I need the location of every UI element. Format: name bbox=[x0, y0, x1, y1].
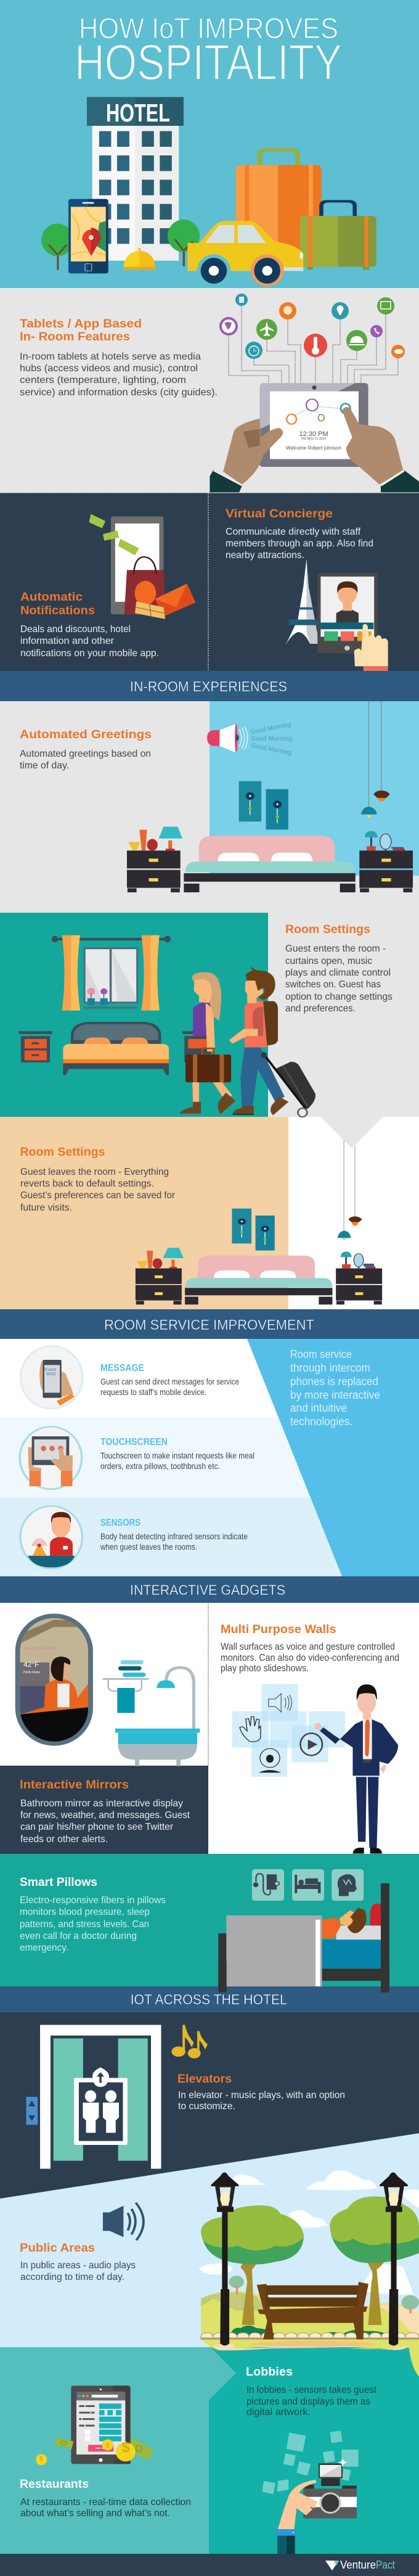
tablet screen text: FRI,NOV 21 2014 bbox=[301, 437, 326, 441]
heading: automatic notifications: Automatic bbox=[20, 591, 83, 604]
text block: room settings leave: Guest’s preferences can be saved for bbox=[20, 1190, 176, 1201]
text block: automatic notifications: information and other bbox=[20, 636, 115, 646]
illustration: wall monitors and presenter bbox=[232, 1684, 398, 1854]
heading: automatic notifications bbox=[20, 591, 95, 617]
text block: automated greetings: Automated greetings based on bbox=[20, 749, 151, 759]
service icon bubbles bbox=[219, 294, 405, 359]
text block: room service summary: Room service bbox=[290, 1348, 352, 1360]
illustration: interactive mirror bbox=[15, 1613, 93, 1746]
text block: tablets bbox=[20, 352, 218, 398]
illustration: towels and bathtub bbox=[103, 1660, 200, 1766]
text block: tablets: hubs (access videos and music), control bbox=[20, 363, 198, 374]
text block: room service summary: and intuitive bbox=[290, 1402, 347, 1414]
logo: VenturePact: Venture bbox=[340, 2559, 376, 2571]
illustration: smart pillow icons and bed bbox=[218, 1869, 389, 2001]
illustration: elevator bbox=[26, 2025, 161, 2169]
icon: hand holding phone: Guest bbox=[44, 1368, 56, 1372]
panel: header background bbox=[0, 0, 419, 288]
heading: public areas: Public Areas bbox=[20, 2242, 95, 2255]
panel: restaurants background bbox=[0, 2347, 419, 2554]
heading: tablets: In- Room Features bbox=[20, 331, 130, 344]
text block: smart pillows: monitors blood pressure, sleep bbox=[20, 1907, 150, 1917]
text block: virtual concierge bbox=[226, 527, 373, 561]
text block: room settings leave: future visits. bbox=[20, 1203, 72, 1213]
heading: multi purpose walls: Multi Purpose Walls bbox=[221, 1623, 336, 1636]
row: sensors bbox=[20, 1506, 248, 1568]
banner: room service improvement bbox=[0, 1309, 419, 1339]
text block: room service summary: phones is replaced bbox=[290, 1375, 378, 1388]
text block: room settings enter: plays and climate control bbox=[285, 968, 391, 978]
text block: elevators: In elevator - music plays, with an option bbox=[178, 2090, 345, 2101]
panel: grey pointer bbox=[320, 1117, 383, 1148]
panel: greetings background bbox=[0, 701, 419, 1117]
illustration: hotel scene bbox=[41, 97, 376, 286]
panel: blue bedroom wall bbox=[210, 701, 419, 876]
text: touchscreen bbox=[100, 1451, 254, 1471]
row: touchscreen bbox=[20, 1426, 254, 1489]
coin symbols: $ bbox=[121, 2439, 130, 2456]
text block: automated greetings bbox=[20, 749, 151, 771]
text block: restaurants bbox=[20, 2497, 191, 2519]
banner: interactive gadgets: INTERACTIVE GADGETS bbox=[130, 1582, 285, 1598]
text block: virtual concierge: Communicate directly with staff bbox=[226, 527, 361, 537]
text block: room service summary: by more interactive bbox=[290, 1389, 380, 1401]
illustration: teal room window and curtains bbox=[52, 936, 171, 1011]
illustration: interactive mirror: Partly Rainy bbox=[23, 1671, 40, 1674]
text block: room settings leave bbox=[20, 1167, 176, 1213]
heading: tablets bbox=[20, 318, 142, 344]
illustration: hotel scene: HOTEL bbox=[106, 99, 170, 127]
text block: multi purpose walls bbox=[221, 1642, 399, 1674]
text: sensors: Body heat detecting infrared sensors indicate bbox=[100, 1531, 248, 1541]
title bbox=[75, 12, 342, 91]
panel: teal room bbox=[0, 913, 268, 1117]
text block: lobbies: In lobbies - sensors takes guest bbox=[246, 2385, 377, 2395]
panel: guest leaves background bbox=[0, 1117, 288, 1309]
text block: smart pillows: patterns, and stress levels. Can bbox=[20, 1919, 149, 1930]
icon: megaphone with greetings: Good Morning bbox=[251, 735, 292, 743]
text: message bbox=[100, 1376, 239, 1397]
text block: smart pillows bbox=[20, 1895, 166, 1953]
icon: megaphone with greetings: Good Morning bbox=[250, 742, 292, 757]
panel: elevators background bbox=[0, 2012, 419, 2199]
text block: restaurants: At restaurants - real-time data collection bbox=[20, 2497, 191, 2508]
text block: lobbies: digital artwork. bbox=[246, 2407, 311, 2418]
heading: interactive mirrors: Interactive Mirrors bbox=[20, 1779, 129, 1792]
text block: smart pillows: even call for a doctor during bbox=[20, 1931, 137, 1941]
heading: virtual concierge: Virtual Concierge bbox=[226, 508, 333, 521]
icon: megaphone with greetings: Good Morning bbox=[250, 721, 291, 736]
row: message bbox=[20, 1346, 239, 1409]
panel: footer bbox=[0, 2554, 419, 2576]
icon: hand holding phone bbox=[20, 1346, 83, 1409]
icon: hand holding phone: MSG bbox=[46, 1372, 56, 1376]
text block: smart pillows: Electro-responsive fibers in pillows bbox=[20, 1895, 166, 1906]
heading: room settings enter: Room Settings bbox=[285, 923, 370, 936]
text block: virtual concierge: members through an app. Also find bbox=[226, 538, 373, 549]
text block: room service summary bbox=[290, 1348, 380, 1428]
text block: room service summary: technologies. bbox=[290, 1415, 352, 1428]
tablet device bbox=[260, 383, 368, 467]
text block: automatic notifications: notifications on your mobile app. bbox=[20, 648, 159, 659]
tablet screen text bbox=[286, 430, 341, 451]
text block: interactive mirrors: Bathroom mirror as interactive display bbox=[20, 1798, 183, 1809]
banner: room service improvement: ROOM SERVICE IMPROVEMENT bbox=[104, 1317, 314, 1333]
text block: lobbies: pictures and displays them as bbox=[246, 2397, 370, 2407]
text block: room settings leave: reverts back to default settings. bbox=[20, 1179, 154, 1189]
coin symbols bbox=[39, 2439, 130, 2463]
banner: iot across the hotel: IOT ACROSS THE HOTEL bbox=[131, 1991, 287, 2007]
banner: in-room experiences: IN-ROOM EXPERIENCES bbox=[130, 678, 287, 694]
hedges bbox=[230, 2326, 390, 2339]
text block: virtual concierge: nearby attractions. bbox=[226, 550, 304, 561]
text block: room service summary: through intercom bbox=[290, 1362, 370, 1374]
text block: elevators: to customize. bbox=[178, 2101, 235, 2112]
text block: public areas: according to time of day. bbox=[20, 2272, 124, 2282]
text block: multi purpose walls: monitors. Can also do video-conferencing and bbox=[221, 1653, 399, 1663]
panel: public areas background bbox=[0, 2133, 419, 2347]
text block: interactive mirrors: feeds or other alerts. bbox=[20, 1834, 108, 1845]
text: sensors bbox=[100, 1531, 248, 1552]
text block: interactive mirrors: for news, weather, and messages. Guest bbox=[20, 1810, 190, 1821]
heading: automated greetings: Automated Greetings bbox=[20, 728, 152, 741]
text block: automatic notifications: Deals and discounts, hotel bbox=[20, 624, 131, 635]
text block: room settings enter: option to change settings bbox=[285, 992, 393, 1002]
banner: iot across the hotel bbox=[0, 1986, 419, 2012]
text block: interactive mirrors bbox=[20, 1798, 190, 1845]
text block: multi purpose walls: play photo slideshows. bbox=[221, 1663, 309, 1674]
dotted connectors bbox=[229, 306, 398, 383]
heading: tablets: Tablets / App Based bbox=[20, 318, 142, 331]
tablet screen text: Welcome Robert johnson bbox=[286, 445, 341, 451]
heading: touchscreen: TOUCHSCREEN bbox=[100, 1437, 168, 1447]
divider: vertical dotted line bbox=[208, 493, 209, 671]
coin symbols: $ bbox=[39, 2456, 43, 2463]
logo: VenturePact: Pact bbox=[376, 2559, 395, 2571]
text block: public areas bbox=[20, 2260, 136, 2282]
text block: room settings leave: Guest leaves the room - Everything bbox=[20, 1167, 169, 1177]
hands bbox=[210, 407, 419, 492]
heading: elevators: Elevators bbox=[177, 2073, 232, 2086]
heading: smart pillows: Smart Pillows bbox=[20, 1876, 97, 1889]
icon: music notes bbox=[171, 2025, 208, 2059]
text block: restaurants: about what’s selling and what’s not. bbox=[20, 2508, 170, 2519]
text: message: requests to staff’s mobile device. bbox=[100, 1387, 206, 1397]
lampposts bbox=[211, 2172, 408, 2345]
illustration: park with bench bbox=[199, 2170, 419, 2377]
title: HOW IoT IMPROVES bbox=[79, 12, 338, 44]
text block: room settings enter bbox=[285, 944, 393, 1014]
illustration: restaurant tablet with coins bbox=[36, 2385, 153, 2465]
icon: megaphone with greetings bbox=[207, 721, 292, 757]
illustration: camera and floating photos bbox=[262, 2430, 359, 2554]
illustration: bedroom with lamps bbox=[127, 701, 413, 892]
illustration: teal room bed and nightstands bbox=[18, 1022, 211, 1075]
icon: speaker bbox=[103, 2203, 144, 2241]
panel: mirrors dark caption bbox=[0, 1766, 208, 1854]
panel: tablets background bbox=[0, 288, 419, 493]
divider: horizontal dotted line bbox=[0, 492, 419, 493]
text block: room settings enter: Guest enters the room - bbox=[285, 944, 386, 954]
illustration: tablet with connected service icons bbox=[210, 294, 419, 492]
text block: smart pillows: emergency. bbox=[20, 1943, 68, 1953]
ground bbox=[201, 2291, 419, 2377]
text block: room settings enter: and preferences. bbox=[285, 1003, 356, 1014]
panel: room service rows bbox=[0, 1339, 419, 1576]
text block: tablets: centers (temperature, lighting, room bbox=[20, 375, 186, 385]
text: sensors: when guest leaves the rooms. bbox=[100, 1542, 197, 1552]
text block: public areas: In public areas - audio plays bbox=[20, 2260, 136, 2271]
text block: automated greetings: time of day. bbox=[20, 760, 69, 771]
heading: message: MESSAGE bbox=[100, 1363, 144, 1373]
icon: touchscreen tablet bbox=[20, 1426, 82, 1489]
illustration: phone with deals bbox=[89, 514, 195, 619]
text block: automatic notifications bbox=[20, 624, 159, 659]
text: touchscreen: orders, extra pillows, toothbrush etc. bbox=[100, 1461, 220, 1471]
illustration: interactive mirror: 42°F bbox=[23, 1660, 39, 1669]
path bbox=[201, 2340, 419, 2350]
heading: automatic notifications: Notifications bbox=[20, 604, 95, 617]
panel: notifications and concierge background bbox=[0, 493, 419, 671]
panel: room service blue wedge bbox=[247, 1339, 419, 1576]
text: touchscreen: Touchscreen to make instant requests like meal bbox=[100, 1451, 254, 1460]
fence bbox=[201, 2333, 419, 2339]
text block: room settings enter: curtains open, music bbox=[285, 956, 372, 966]
text block: lobbies bbox=[246, 2385, 377, 2418]
text block: room settings enter: switches on. Guest has bbox=[285, 979, 381, 990]
text: message: Guest can send direct messages for service bbox=[100, 1376, 239, 1386]
clouds bbox=[199, 2170, 419, 2295]
banner: interactive gadgets bbox=[0, 1576, 419, 1603]
illustration: couple with luggage bbox=[179, 966, 315, 1117]
heading: lobbies: Lobbies bbox=[246, 2366, 293, 2379]
heading: sensors: SENSORS bbox=[100, 1518, 140, 1528]
text block: multi purpose walls: Wall surfaces as voice and gesture controlled bbox=[221, 1642, 395, 1652]
tree canopies bbox=[201, 2205, 304, 2265]
text block: interactive mirrors: can pair his/her phone to see Twitter bbox=[20, 1822, 174, 1832]
heading: room settings leave: Room Settings bbox=[20, 1146, 105, 1159]
illustration: concierge on tablet with Eiffel tower bbox=[285, 559, 388, 671]
text block: elevators bbox=[178, 2090, 345, 2112]
bench bbox=[257, 2284, 274, 2339]
title: HOSPITALITY bbox=[75, 35, 342, 91]
panel: smart pillows background bbox=[0, 1854, 419, 1986]
coin symbols: $ bbox=[106, 2443, 110, 2450]
trunks bbox=[240, 2259, 258, 2325]
text block: tablets: In-room tablets at hotels serve as media bbox=[20, 352, 201, 362]
bed legs over banner bbox=[218, 1961, 389, 1993]
tablet screen text: 12:30 PM bbox=[299, 430, 328, 438]
icon: staff member with sensor bell bbox=[20, 1506, 83, 1568]
illustration: default bedroom bbox=[136, 1140, 382, 1304]
logo: VenturePact bbox=[325, 2559, 395, 2571]
banner: in-room experiences bbox=[0, 671, 419, 701]
panel: lobbies background bbox=[209, 2347, 419, 2554]
divider: gadgets vertical dotted line bbox=[208, 1603, 209, 1766]
illustration: interactive mirror: Today's Weather bbox=[24, 1647, 56, 1651]
text block: tablets: service) and information desks (city guides). bbox=[20, 387, 218, 398]
heading: restaurants: Restaurants bbox=[20, 2478, 89, 2491]
